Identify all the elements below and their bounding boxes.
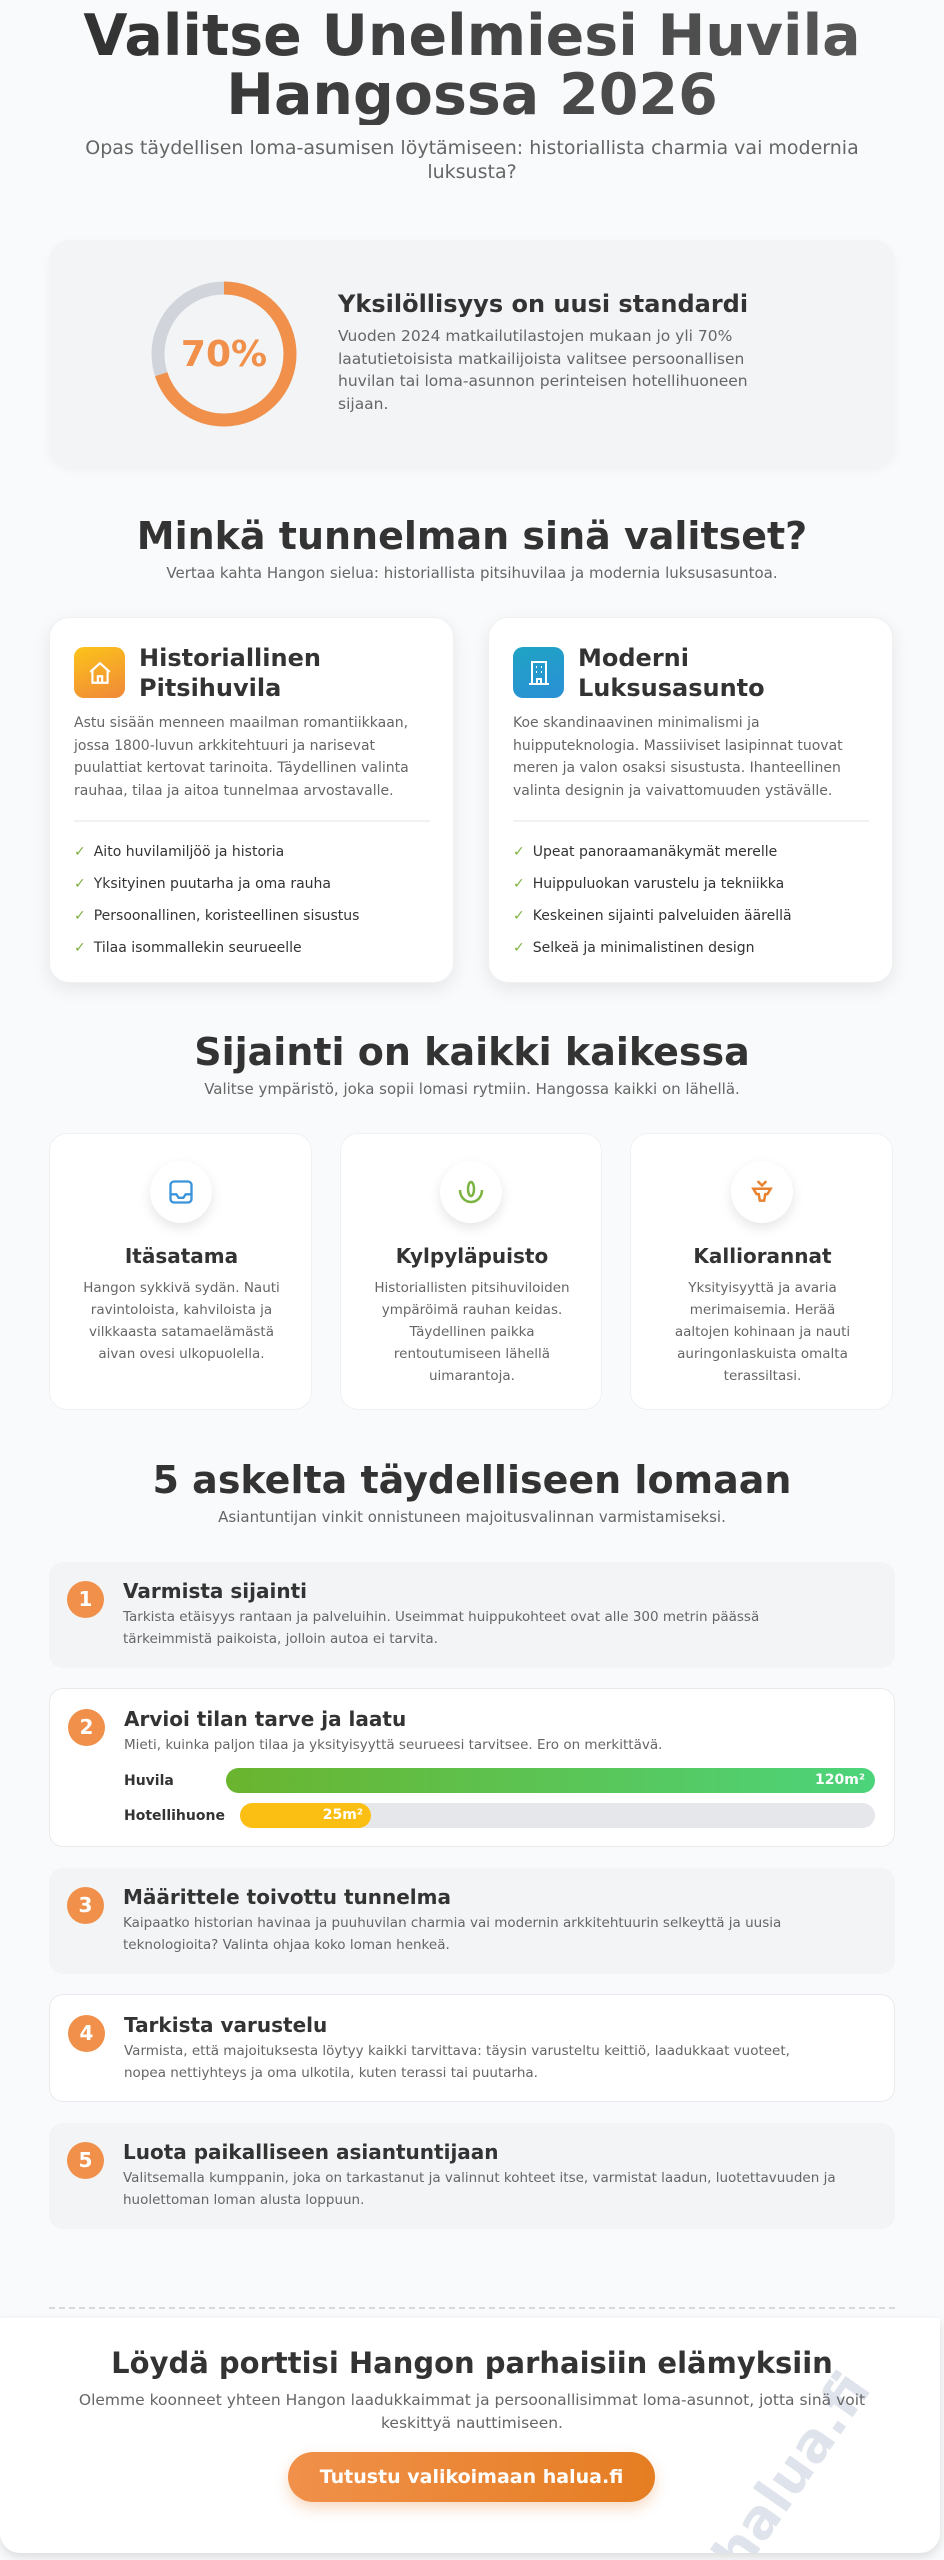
step 1: Varmista sijainti <box>123 1579 307 1603</box>
step 5: Valitsemalla kumppanin, joka on tarkastanut ja valinnut kohteet itse, varmistat laadun, luotettavuuden ja huolettoman loman alusta loppuun. <box>123 2170 836 2208</box>
donut chart 70% <box>152 282 296 426</box>
footer panel <box>0 2318 940 2553</box>
stat heading: Yksilöllisyys on uusi standardi <box>338 290 748 318</box>
bar chart: Hotellihuone <box>124 1808 225 1824</box>
step 3 <box>49 1868 895 1974</box>
heading <box>139 644 321 702</box>
checklist: ✓ Persoonallinen, koristeellinen sisustus <box>74 908 359 924</box>
text: Hangon sykkivä sydän. Nauti ravintoloista, kahviloista ja vilkkaasta satamaelämästä aivan ovesi ulkopuolella. <box>83 1280 280 1362</box>
step 2 with bar chart: 2 <box>80 1715 93 1739</box>
checklist: ✓ Upeat panoraamanäkymät merelle <box>513 844 777 860</box>
step 4: Tarkista varustelu <box>124 2013 327 2037</box>
step 3: Kaipaatko historian havinaa ja puuhuvilan charmia vai modernin arkkitehtuurin selkeyttä ja uusia teknologioita? Valinta ohjaa koko loman henkeä. <box>123 1915 781 1953</box>
checklist: ✓ Selkeä ja minimalistinen design <box>513 940 755 956</box>
step 3: Määrittele toivottu tunnelma <box>123 1885 451 1909</box>
stat panel <box>49 240 895 467</box>
step 3: 3 <box>79 1893 92 1917</box>
button: Tutustu valikoimaan halua.fi <box>320 2466 623 2488</box>
title: Kylpyläpuisto <box>396 1244 548 1268</box>
step 4: 4 <box>80 2021 93 2045</box>
panel: kylpyläpuisto <box>340 1133 602 1410</box>
footer text: Olemme koonneet yhteen Hangon laadukkaimmat ja persoonallisimmat loma-asunnot, jotta sinä voit keskittyä nauttimiseen. <box>79 2391 865 2432</box>
bar chart: Huvila <box>124 1773 174 1789</box>
donut chart 70%: 70% <box>181 334 267 375</box>
step 5: 5 <box>79 2148 92 2172</box>
bar chart: 120m² <box>815 1772 865 1788</box>
bar chart <box>124 1768 875 1828</box>
stat text: Vuoden 2024 matkailutilastojen mukaan jo yli 70% laatutietoisista matkailijoista valitsee persoonallisen huvilan tai loma-asunnon perinteisen hotellihuoneen sijaan. <box>338 327 748 412</box>
step 5: Luota paikalliseen asiantuntijaan <box>123 2140 499 2164</box>
title: Hangossa 2026 <box>226 62 718 128</box>
checklist <box>74 844 359 956</box>
text: Historiallisten pitsihuviloiden ympäröimä rauhan keidas. Täydellinen paikka rentoutumiseen lähellä uimarantoja. <box>374 1280 570 1384</box>
button <box>288 2452 655 2502</box>
title: Kalliorannat <box>693 1244 832 1268</box>
section subtitle: Asiantuntijan vinkit onnistuneen majoitusvalinnan varmistamiseksi. <box>218 1508 726 1526</box>
panel: moderni <box>488 617 893 983</box>
footer heading: Löydä porttisi Hangon parhaisiin elämyksiin <box>111 2346 833 2380</box>
heading: Pitsihuvila <box>139 674 281 702</box>
checklist: ✓ Yksityinen puutarha ja oma rauha <box>74 876 331 892</box>
checklist: ✓ Keskeinen sijainti palveluiden äärellä <box>513 908 792 924</box>
section subtitle: Valitse ympäristö, joka sopii lomasi rytmiin. Hangossa kaikki on lähellä. <box>204 1080 740 1098</box>
step 4 <box>49 1994 895 2102</box>
checklist: ✓ Aito huvilamiljöö ja historia <box>74 844 284 860</box>
text: Koe skandinaavinen minimalismi ja huipputeknologia. Massiiviset lasipinnat tuovat meren ja valon osaksi sisustusta. Ihanteellinen valinta designin ja vaivattomuuden ystävälle. <box>513 715 843 798</box>
step 1: Tarkista etäisyys rantaan ja palveluihin. Useimmat huippukohteet ovat alle 300 metrin päässä tärkeimmistä paikoista, jolloin autoa ei tarvita. <box>123 1609 759 1647</box>
step 2 with bar chart <box>49 1688 895 1847</box>
step 1 <box>49 1562 895 1668</box>
text: Yksityisyyttä ja avaria merimaisemia. Herää aaltojen kohinaan ja nauti auringonlaskuista omalta terassiltasi. <box>675 1280 850 1384</box>
step 5 <box>49 2123 895 2229</box>
title <box>83 3 861 128</box>
title: Valitse Unelmiesi Huvila <box>83 3 861 69</box>
section heading: askeleet: 5 askelta täydelliseen lomaan <box>152 1458 792 1502</box>
step 1: 1 <box>79 1587 92 1611</box>
icon: spa <box>440 1161 502 1223</box>
step 2 with bar chart: Arvioi tilan tarve ja laatu <box>124 1707 406 1731</box>
section heading: tunnelma: Minkä tunnelman sinä valitset? <box>137 514 807 558</box>
checklist: ✓ Huippuluokan varustelu ja tekniikka <box>513 876 784 892</box>
icon: building <box>513 647 564 698</box>
section heading: sijainti: Sijainti on kaikki kaikessa <box>194 1030 750 1074</box>
panel: kalliorannat <box>630 1133 893 1410</box>
step 2 with bar chart: Mieti, kuinka paljon tilaa ja yksityisyyttä seurueesi tarvitsee. Ero on merkittävä. <box>124 1737 662 1753</box>
bar chart: 25m² <box>323 1807 363 1823</box>
heading: Moderni <box>578 644 689 672</box>
panel: itäsatama <box>49 1133 312 1410</box>
icon: house <box>74 647 125 698</box>
subtitle: Opas täydellisen loma-asumisen löytämiseen: historiallista charmia vai modernia luksusta? <box>85 137 859 183</box>
section subtitle: Vertaa kahta Hangon sielua: historiallista pitsihuvilaa ja modernia luksusasuntoa. <box>166 564 778 582</box>
icon: tray <box>150 1161 212 1223</box>
icon: rock <box>730 1161 792 1223</box>
step 4: Varmista, että majoituksesta löytyy kaikki tarvittava: täysin varusteltu keittiö, laadukkaat vuoteet, <box>124 2043 790 2059</box>
text: Astu sisään menneen maailman romantiikkaan, jossa 1800-luvun arkkitehtuuri ja narisevat puulattiat kertovat tarinoita. Täydellinen valinta rauhaa, tilaa ja aitoa tunnelmaa arvostavalle. <box>74 715 409 798</box>
heading <box>578 644 765 702</box>
checklist <box>513 844 792 956</box>
title: Itäsatama <box>125 1244 238 1268</box>
checklist: ✓ Tilaa isommallekin seurueelle <box>74 940 302 956</box>
panel: historiallinen <box>49 617 454 983</box>
heading: Luksusasunto <box>578 674 765 702</box>
heading: Historiallinen <box>139 644 321 672</box>
step 4: nopea nettiyhteys ja oma ulkotila, kuten terassi tai puutarha. <box>124 2065 538 2081</box>
